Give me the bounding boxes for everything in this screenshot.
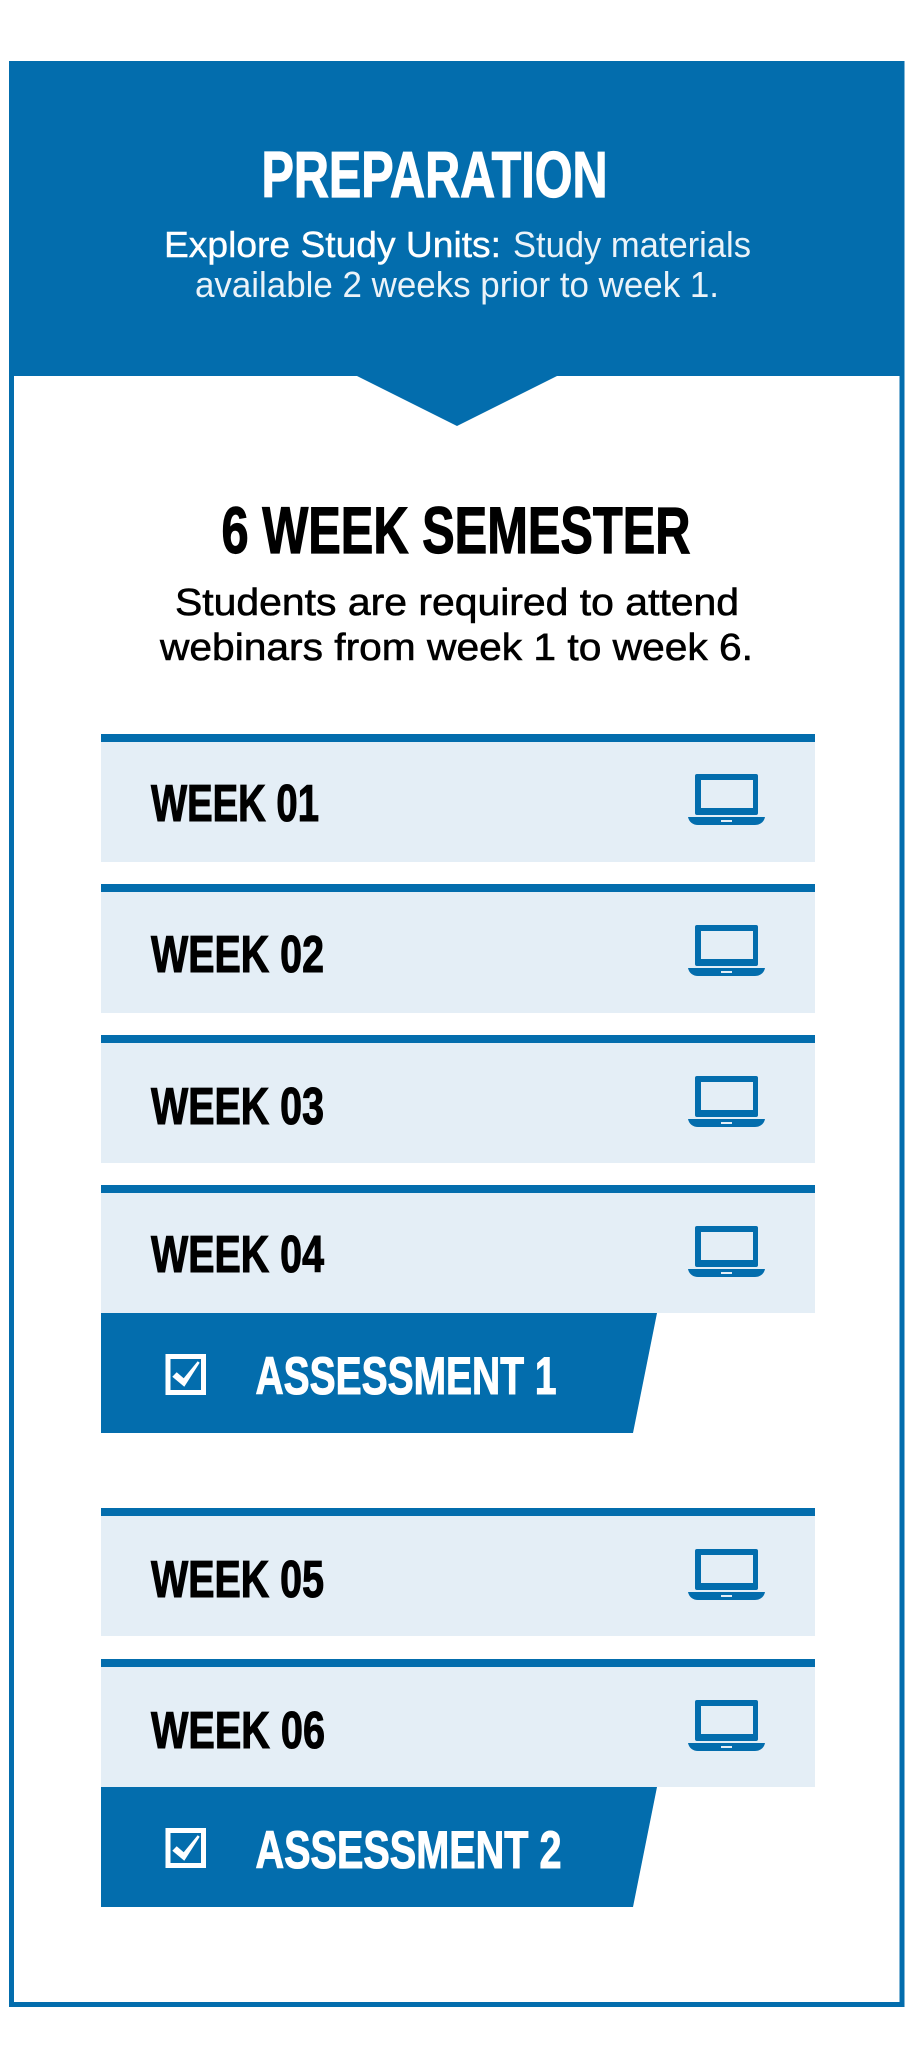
icon: laptop [688, 1700, 765, 1751]
heading: 6 week semester: 6 WEEK SEMESTER [222, 493, 690, 567]
icon: laptop [688, 774, 765, 825]
panel: week 03: WEEK 03 [151, 1078, 324, 1136]
panel: week 06 [101, 1659, 815, 1787]
icon: laptop [688, 1226, 765, 1277]
banner: assessment 2: ASSESSMENT 2 [256, 1821, 562, 1880]
icon: laptop [688, 1076, 765, 1127]
banner: assessment 1: ASSESSMENT 1 [256, 1347, 556, 1406]
icon: laptop [688, 925, 765, 976]
panel: week 01 [101, 734, 815, 862]
text: webinar requirement: webinars from week 1 to week 6. [159, 627, 753, 669]
panel: week 06: WEEK 06 [151, 1702, 325, 1760]
panel: week 01: WEEK 01 [151, 775, 319, 833]
banner: assessment 1 [101, 1313, 657, 1433]
banner: assessment 2 [101, 1787, 657, 1907]
icon: checkbox [168, 1830, 204, 1866]
icon: checkbox [168, 1356, 204, 1392]
text: webinar requirement: Students are required to attend [175, 582, 739, 624]
text: webinar requirement [159, 582, 753, 669]
icon: laptop [688, 1549, 765, 1600]
text: preparation description: Study materials [513, 224, 751, 265]
header background with pointer [9, 61, 904, 426]
panel: week 04: WEEK 04 [151, 1226, 324, 1284]
text: preparation description: Explore Study Units: [164, 224, 501, 265]
panel: week 02 [101, 884, 815, 1013]
panel: week 03 [101, 1035, 815, 1163]
panel: week 02: WEEK 02 [151, 926, 324, 984]
panel: week 05 [101, 1508, 815, 1636]
text: preparation description: available 2 weeks prior to week 1. [195, 264, 719, 305]
panel: week 04 [101, 1185, 815, 1313]
heading: preparation: PREPARATION [262, 138, 608, 211]
panel: week 05: WEEK 05 [151, 1551, 324, 1609]
text: preparation description [164, 224, 751, 305]
panel: preparation header [9, 61, 904, 426]
